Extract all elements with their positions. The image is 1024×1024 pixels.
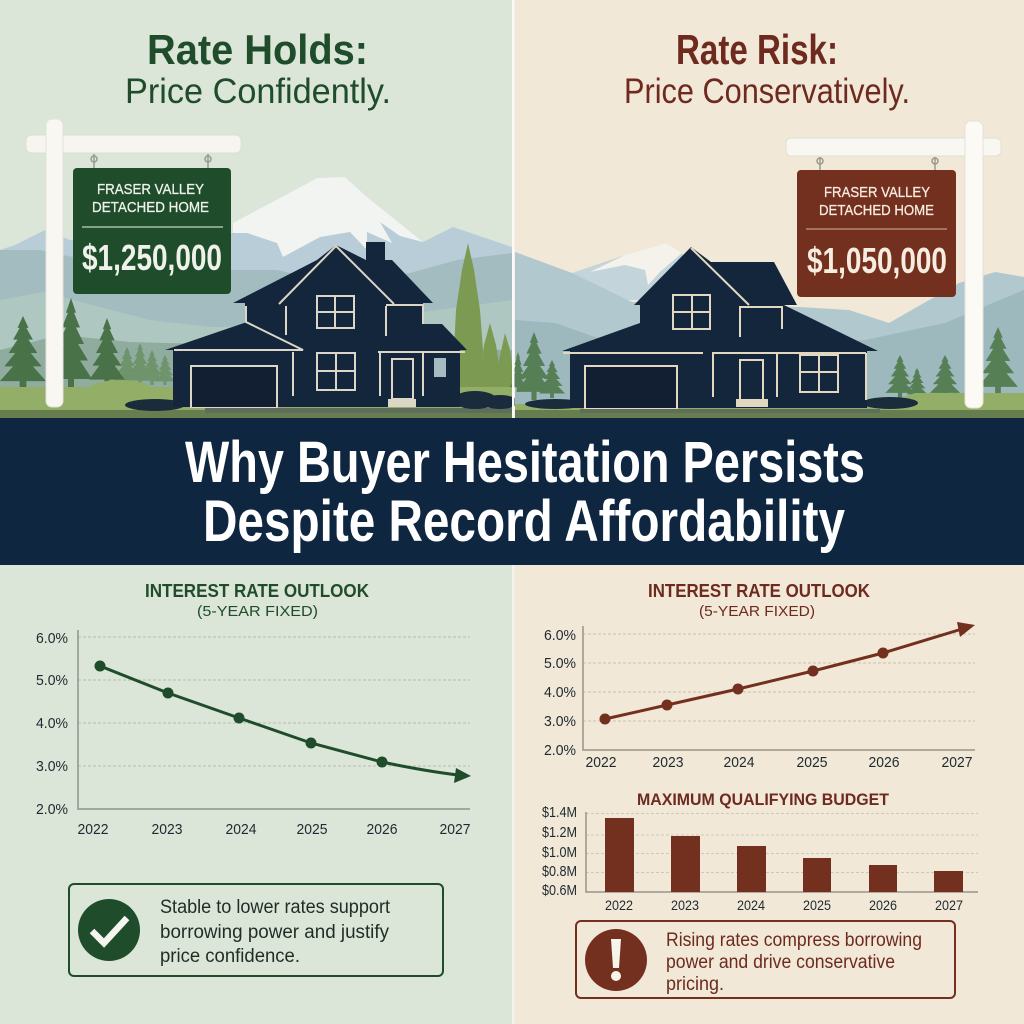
line chart: left falling rates: 4.0% xyxy=(36,715,68,732)
bar chart: maximum qualifying budget: MAXIMUM QUALIFYING BUDGET xyxy=(637,790,890,809)
line chart: left falling rates: 2.0% xyxy=(36,801,68,818)
sign: right price board: FRASER VALLEY xyxy=(824,184,930,201)
sign: right post xyxy=(786,121,1001,408)
sign: right price board: $1,050,000 xyxy=(807,240,947,281)
line chart: right rising rates: 3.0% xyxy=(544,713,576,730)
bar chart: maximum qualifying budget: 2025 xyxy=(803,897,831,913)
line chart: left falling rates: 2025 xyxy=(296,821,328,838)
bar chart: maximum qualifying budget: 2023 xyxy=(671,897,699,913)
bar chart: maximum qualifying budget: $0.6M xyxy=(542,882,577,899)
bar chart: maximum qualifying budget: 2022 xyxy=(605,897,633,913)
icon: exclamation mark xyxy=(585,929,647,991)
scene: left mountains and house xyxy=(0,177,518,418)
panel: right background xyxy=(513,0,1024,1024)
icon: right house xyxy=(562,247,878,408)
line chart: right rising rates: 4.0% xyxy=(544,684,576,701)
callout: left message: borrowing power and justify xyxy=(160,922,389,943)
bar chart: maximum qualifying budget: $1.2M xyxy=(542,824,577,841)
line chart: left falling rates: 2027 xyxy=(440,821,470,838)
sign: left price board xyxy=(73,168,231,294)
line chart: right rising rates: 2.0% xyxy=(544,742,576,759)
chart title: left rate outlook: (5-YEAR FIXED) xyxy=(197,603,318,620)
icon: left house xyxy=(165,242,467,407)
bar chart: maximum qualifying budget: $0.8M xyxy=(542,863,577,880)
line chart: left falling rates: 2024 xyxy=(226,821,256,838)
sign: right price board: DETACHED HOME xyxy=(819,202,934,219)
bar chart: maximum qualifying budget xyxy=(542,790,978,913)
sign: right price board xyxy=(797,170,956,297)
line chart: left falling rates: 2023 xyxy=(152,821,182,838)
callout: left message: price confidence. xyxy=(160,946,300,967)
chart title: right rate outlook xyxy=(648,581,870,620)
callout: left message: Stable to lower rates support xyxy=(160,897,391,918)
line chart: right rising rates: 2023 xyxy=(652,754,684,771)
panel: left background xyxy=(0,0,513,1024)
line chart: right rising rates: 2022 xyxy=(586,754,616,771)
sign: left price board: DETACHED HOME xyxy=(92,199,209,216)
heading: rate risk: Price Conservatively. xyxy=(624,72,910,111)
sign: left price board: FRASER VALLEY xyxy=(97,181,204,198)
heading: rate risk xyxy=(624,26,910,111)
banner: main title xyxy=(0,418,1024,565)
sign: hooks right xyxy=(817,157,938,173)
line chart: right rising rates: 6.0% xyxy=(544,627,576,644)
line chart: left falling rates: 2026 xyxy=(366,821,398,838)
line chart: left falling rates xyxy=(36,630,471,838)
chart title: left rate outlook: INTEREST RATE OUTLOOK xyxy=(145,581,369,601)
chart title: left rate outlook xyxy=(145,581,369,620)
chart title: right rate outlook: INTEREST RATE OUTLOOK xyxy=(648,581,870,601)
line chart: right rising rates: 2027 xyxy=(942,754,972,771)
line chart: right rising rates: 2024 xyxy=(724,754,754,771)
line chart: right rising rates xyxy=(544,622,975,771)
icon: check mark xyxy=(78,899,140,961)
bar chart: maximum qualifying budget: 2027 xyxy=(935,897,963,913)
line chart: right rising rates: 2025 xyxy=(796,754,828,771)
heading: rate holds xyxy=(125,26,391,111)
line chart: left falling rates: 5.0% xyxy=(36,672,68,689)
sign: left post xyxy=(26,119,241,407)
line chart: left falling rates: 2022 xyxy=(78,821,108,838)
banner: main title: Why Buyer Hesitation Persists xyxy=(185,430,865,495)
callout: right message: Rising rates compress borrowing xyxy=(666,930,922,951)
callout: right message: pricing. xyxy=(666,974,724,995)
heading: rate risk: Rate Risk: xyxy=(676,26,838,73)
callout: right message: power and drive conservative xyxy=(666,952,895,973)
heading: rate holds: Rate Holds: xyxy=(147,26,368,73)
callout: right message xyxy=(576,921,955,998)
line chart: right rising rates: 5.0% xyxy=(544,655,576,672)
sign: hooks left xyxy=(91,154,211,170)
bar chart: maximum qualifying budget: 2024 xyxy=(737,897,765,913)
callout: left message xyxy=(69,884,443,976)
banner: main title: Despite Record Affordability xyxy=(203,489,845,554)
heading: rate holds: Price Confidently. xyxy=(125,72,391,111)
sign: left price board: $1,250,000 xyxy=(82,237,222,278)
bar chart: maximum qualifying budget: $1.0M xyxy=(542,844,577,861)
line chart: right rising rates: 2026 xyxy=(868,754,900,771)
chart title: right rate outlook: (5-YEAR FIXED) xyxy=(699,603,815,620)
line chart: left falling rates: 6.0% xyxy=(36,630,68,647)
scene: right mountains and house xyxy=(510,243,1024,418)
bar chart: maximum qualifying budget: $1.4M xyxy=(542,804,577,821)
bar chart: maximum qualifying budget: 2026 xyxy=(869,897,897,913)
line chart: left falling rates: 3.0% xyxy=(36,758,68,775)
